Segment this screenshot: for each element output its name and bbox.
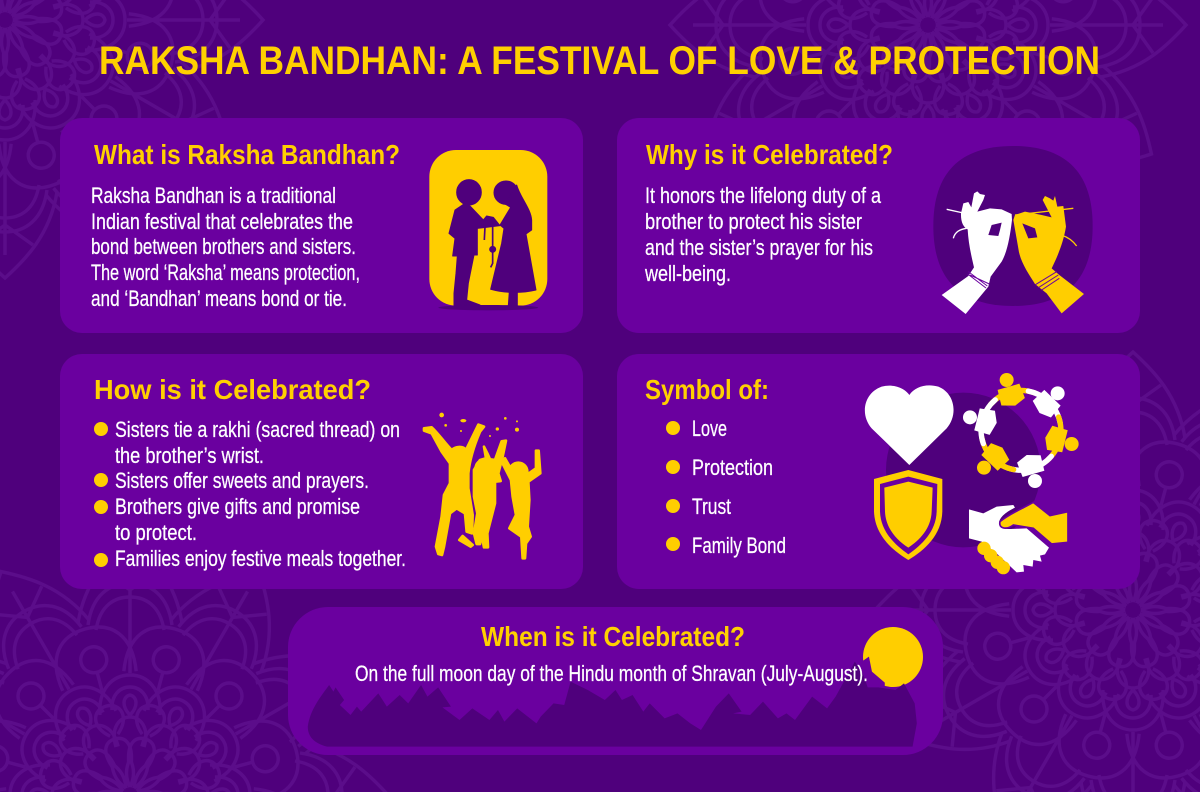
list: how: to protect. xyxy=(115,520,197,545)
text block: what: bond between brothers and sisters. xyxy=(91,234,356,259)
heading: symbol: Symbol of: xyxy=(645,374,769,405)
heading: why: Why is it Celebrated? xyxy=(646,139,893,170)
text block: what: Raksha Bandhan is a traditional xyxy=(91,183,336,208)
panel: what is raksha bandhan xyxy=(60,118,583,333)
text block: what: The word ‘Raksha’ means protection, xyxy=(91,260,360,285)
icon: shield xyxy=(874,470,942,560)
title: RAKSHA BANDHAN: A FESTIVAL OF LOVE & PROTECTION xyxy=(99,39,1100,83)
list: how xyxy=(94,417,406,571)
list: symbols: Family Bond xyxy=(692,533,786,558)
text block: when: On the full moon day of the Hindu month of Shravan (July-August). xyxy=(355,661,868,686)
icon: handshake xyxy=(969,502,1068,574)
icon: dancing people xyxy=(424,413,540,558)
list: symbols: Protection xyxy=(692,455,773,480)
icon group: symbols xyxy=(865,373,1079,574)
list: how: Sisters tie a rakhi (sacred thread) on xyxy=(115,417,400,442)
list: how: Families enjoy festive meals together. xyxy=(115,546,406,571)
text block: why xyxy=(644,183,882,286)
panel: how is it celebrated xyxy=(60,354,583,589)
text block: what: Indian festival that celebrates the xyxy=(91,209,353,234)
list: symbols xyxy=(666,416,786,558)
icon: brother and sister silhouette xyxy=(429,150,547,310)
list: symbols: Trust xyxy=(692,494,731,519)
panel: when is it celebrated xyxy=(288,607,943,755)
panel: symbol of xyxy=(617,354,1140,589)
list: symbols: Love xyxy=(692,416,727,441)
text block: why: It honors the lifelong duty of a xyxy=(645,183,882,208)
illustration: forest silhouette xyxy=(308,662,917,747)
text block: what xyxy=(91,183,360,311)
icon: heart xyxy=(865,385,954,465)
icon: hands tying thread xyxy=(933,146,1093,314)
text block: what: and ‘Bandhan’ means bond or tie. xyxy=(91,286,347,311)
panel: why is it celebrated xyxy=(617,118,1140,333)
list: how: Sisters offer sweets and prayers. xyxy=(115,468,369,493)
text block: why: brother to protect his sister xyxy=(645,209,862,234)
heading: when: When is it Celebrated? xyxy=(481,621,745,652)
text block: why: well-being. xyxy=(644,261,731,286)
icon: people circle xyxy=(963,373,1079,488)
heading: how: How is it Celebrated? xyxy=(94,374,371,405)
text block: why: and the sister’s prayer for his xyxy=(645,235,873,260)
icon: full moon xyxy=(857,627,923,688)
list: how: the brother’s wrist. xyxy=(115,443,264,468)
list: how: Brothers give gifts and promise xyxy=(115,494,360,519)
heading: what: What is Raksha Bandhan? xyxy=(94,139,400,170)
